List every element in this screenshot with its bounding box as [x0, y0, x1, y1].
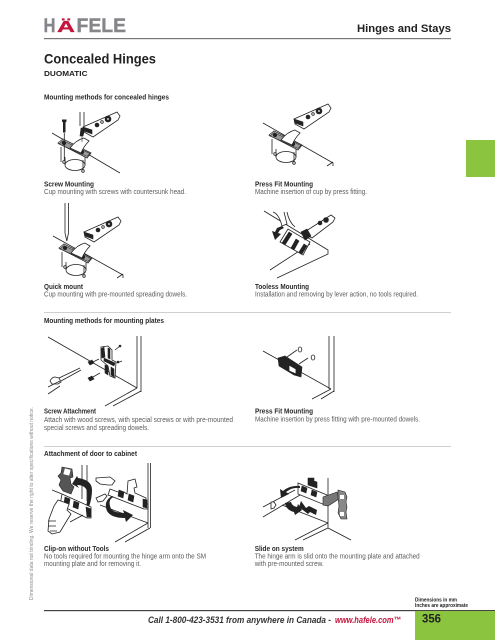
illustration: press fit mounting	[263, 104, 333, 166]
dimensions note	[415, 598, 468, 609]
caption: screw attachment: Attach with wood screws, with special screws or with pre-mounted	[44, 417, 233, 424]
heading: mounting plates: Mounting methods for mounting plates	[44, 318, 164, 325]
caption: slide on: The hinge arm is slid onto the mounting plate and attached	[255, 554, 420, 560]
footer call line: Call 1-800-423-3531 from anywhere in Canada -	[148, 615, 331, 626]
heading: concealed hinges: Mounting methods for concealed hinges	[44, 94, 169, 102]
heading: door attachment: Attachment of door to cabinet	[44, 451, 138, 458]
illustration: screw attachment	[48, 336, 141, 406]
caption: slide on: with pre-mounted screw.	[254, 561, 324, 568]
caption: quick mount: Quick mount	[44, 284, 84, 291]
caption: screw mounting: Cup mounting with screws with countersunk head.	[44, 189, 186, 196]
illustration: tooless mounting	[264, 211, 335, 278]
footer rule	[44, 610, 495, 611]
footer call line: www.hafele.com™	[335, 615, 401, 625]
caption: screw mounting	[44, 182, 186, 196]
caption: tooless mounting: Installation and removing by lever action, no tools required.	[255, 292, 418, 298]
illustration: press fit plate	[263, 336, 334, 399]
caption: quick mount	[44, 284, 187, 298]
caption: clip-on: No tools required for mounting the hinge arm onto the SM	[44, 554, 206, 560]
subtitle: DUOMATIC	[44, 69, 88, 78]
caption: tooless mounting	[255, 284, 418, 298]
logo: Ä	[57, 19, 75, 36]
illustration: slide on system	[263, 478, 351, 540]
illustration: quick mount	[53, 203, 123, 278]
section header: Hinges and Stays: Hinges and Stays	[357, 23, 451, 35]
illustration: screw mounting	[52, 112, 120, 173]
caption: screw mounting: Screw Mounting	[44, 182, 94, 188]
green side tab	[466, 140, 495, 177]
caption: quick mount: Cup mounting with pre-mounted spreading dowels.	[44, 292, 187, 298]
dimensions note: Inches are approximate	[415, 603, 468, 609]
caption: clip-on	[44, 546, 206, 568]
caption: tooless mounting: Tooless Mounting	[255, 284, 309, 291]
caption: press fit mounting	[255, 182, 367, 196]
page number box	[415, 611, 495, 640]
caption: press fit plate: Press Fit Mounting	[255, 408, 313, 416]
vertical disclaimer: Dimensional data not binding. We reserve the right to alter specifications without notice.	[29, 407, 35, 600]
caption: press fit mounting: Machine insertion of cup by press fitting.	[255, 189, 367, 196]
dimensions note: Dimensions in mm	[415, 598, 457, 604]
caption: slide on: Slide on system	[255, 546, 304, 553]
caption: press fit plate	[255, 408, 420, 424]
caption: clip-on: Clip-on without Tools	[44, 546, 109, 553]
title: Concealed Hinges	[44, 50, 156, 66]
caption: press fit mounting: Press Fit Mounting	[255, 182, 313, 188]
logo	[44, 15, 126, 37]
caption: screw attachment: special screws and spreading dowels.	[44, 425, 149, 432]
logo: FELE	[76, 15, 126, 37]
caption: press fit plate: Machine insertion by press fitting with pre-mounted dowels.	[255, 416, 420, 424]
caption: screw attachment	[44, 408, 233, 432]
caption: clip-on: mounting plate and for removing it.	[44, 561, 141, 568]
illustration: clip-on without tools	[48, 463, 150, 542]
caption: screw attachment: Screw Attachment	[44, 408, 97, 416]
page number box: 356	[422, 614, 441, 626]
caption: slide on	[254, 546, 420, 568]
header rule	[44, 38, 451, 39]
logo: H	[44, 15, 56, 37]
